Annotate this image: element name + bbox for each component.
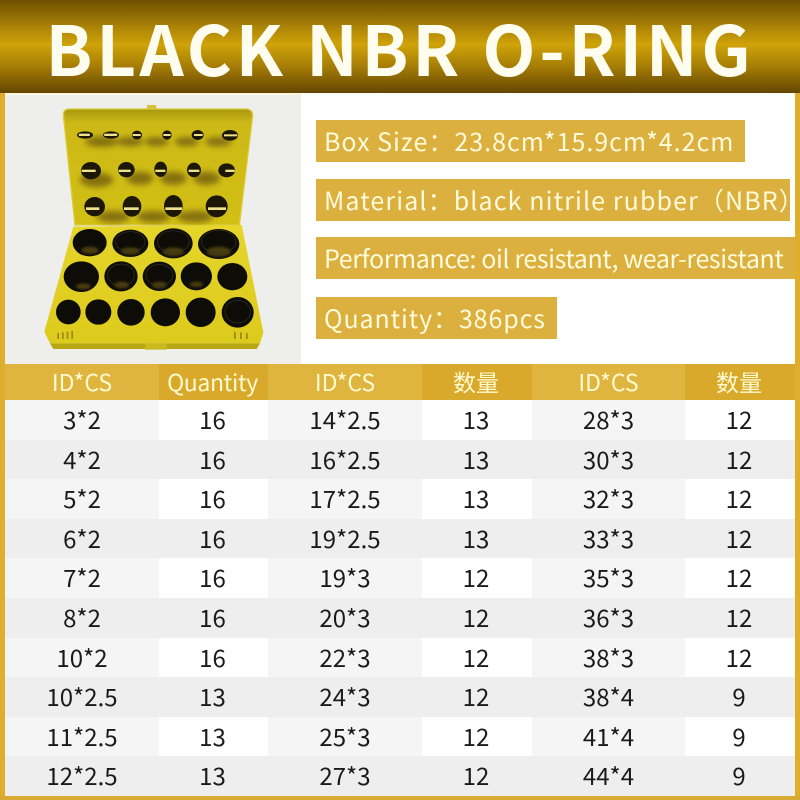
table row 5 <box>5 558 752 598</box>
table row 10: 44*4 <box>583 757 634 792</box>
table row 4: 13 <box>463 520 489 555</box>
table row 6: 20*3 <box>319 599 371 634</box>
table row 3: 32*3 <box>583 480 634 515</box>
table row 2: 13 <box>463 441 489 476</box>
table row 6: 8*2 <box>63 599 101 634</box>
table row 3: 13 <box>463 480 489 515</box>
table row 3: 12 <box>726 480 752 515</box>
table row 5: 16 <box>199 559 226 594</box>
table row 8: 24*3 <box>319 678 371 713</box>
table row 6: 12 <box>463 599 489 634</box>
table header row: ID*CS <box>315 364 375 398</box>
table row 7: 22*3 <box>319 639 371 674</box>
spec bar: box size: Box Size：23.8cm*15.9cm*4.2cm <box>324 123 734 159</box>
table row 5: 12 <box>463 559 489 594</box>
page frame: right border <box>795 93 800 800</box>
table row 4: 33*3 <box>583 520 634 555</box>
table header row: ID*CS <box>52 364 112 398</box>
panel: product photo <box>5 93 301 364</box>
table row 10: 27*3 <box>319 757 371 792</box>
table header row: ID*CS <box>578 364 639 398</box>
table row 1 <box>5 400 752 440</box>
table row 7: 12 <box>463 639 489 674</box>
table row 7: 38*3 <box>583 639 634 674</box>
table row 6: 12 <box>726 599 752 634</box>
table row 1: 3*2 <box>63 401 101 436</box>
table row 6 <box>5 598 795 638</box>
table row 5: 19*3 <box>319 559 371 594</box>
table row 9: 13 <box>199 718 226 753</box>
table row 2: 12 <box>726 441 752 476</box>
table row 9: 12 <box>463 718 489 753</box>
table header row: Quantity <box>167 364 258 398</box>
table row 4: 16 <box>199 520 226 555</box>
table row 8: 12 <box>463 678 489 713</box>
table row 1: 28*3 <box>583 401 634 436</box>
table header row: 数量 <box>716 364 762 398</box>
table row 10: 9 <box>732 757 746 792</box>
table row 1: 12 <box>726 401 752 436</box>
title banner <box>0 0 800 93</box>
table row 1: 13 <box>463 401 489 436</box>
page frame: bottom border <box>0 796 800 800</box>
table row 8: 10*2.5 <box>46 678 118 713</box>
table row 8: 9 <box>732 678 746 713</box>
table row 3: 17*2.5 <box>309 480 381 515</box>
table header row: 数量 <box>453 364 499 398</box>
table row 7: 10*2 <box>56 639 108 674</box>
table row 2: 4*2 <box>63 441 101 476</box>
table header row <box>5 364 795 400</box>
spec bar: performance: Performance: oil resistant, wear-resistant <box>324 240 783 276</box>
table row 10: 12 <box>463 757 489 792</box>
table row 3: 16 <box>199 480 226 515</box>
table row 9 <box>5 717 746 756</box>
spec bar: quantity: Quantity：386pcs <box>324 300 546 336</box>
table row 9: 41*4 <box>583 718 634 753</box>
table row 3 <box>5 479 752 519</box>
table row 7 <box>5 638 752 677</box>
table row 8: 13 <box>199 678 226 713</box>
table row 9: 9 <box>732 718 746 753</box>
table row 5: 12 <box>726 559 752 594</box>
table row 4: 12 <box>726 520 752 555</box>
table row 6: 16 <box>199 599 226 634</box>
table row 7: 16 <box>199 639 226 674</box>
table row 1: 16 <box>199 401 226 436</box>
table row 4: 19*2.5 <box>309 520 381 555</box>
table row 6: 36*3 <box>583 599 634 634</box>
table row 8 <box>5 677 795 717</box>
table row 5: 35*3 <box>583 559 634 594</box>
table row 5: 7*2 <box>63 559 101 594</box>
table row 4: 6*2 <box>63 520 101 555</box>
table row 2: 30*3 <box>583 441 634 476</box>
table row 8: 38*4 <box>583 678 634 713</box>
table row 3: 5*2 <box>63 480 101 515</box>
page frame: left border <box>0 93 5 800</box>
table row 2: 16*2.5 <box>309 441 381 476</box>
table row 10 <box>5 756 795 796</box>
table row 4 <box>5 519 795 558</box>
table row 10: 13 <box>199 757 226 792</box>
table row 9: 11*2.5 <box>46 718 118 753</box>
icon: yellow O-ring box <box>44 105 264 350</box>
table row 7: 12 <box>726 639 752 674</box>
table row 2 <box>5 440 795 479</box>
table row 2: 16 <box>199 441 226 476</box>
table row 1: 14*2.5 <box>309 401 381 436</box>
table row 10: 12*2.5 <box>46 757 118 792</box>
table row 9: 25*3 <box>319 718 371 753</box>
